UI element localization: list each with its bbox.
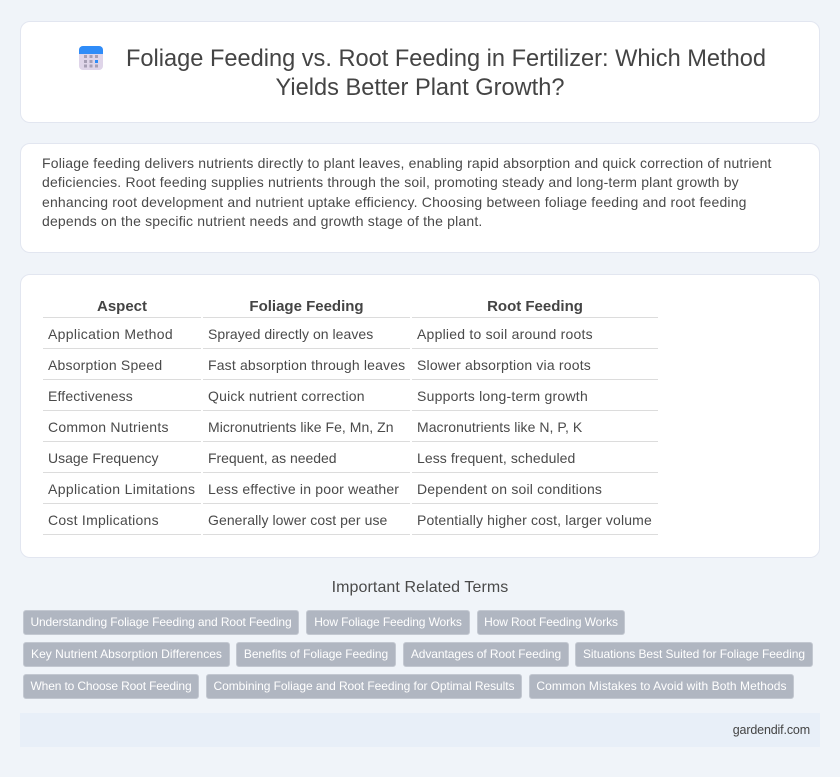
panel: comparison table: [20, 274, 820, 558]
comparison table: Usage Frequency: [48, 450, 159, 466]
panel: title card: [20, 21, 820, 123]
related term tags: Benefits of Foliage Feeding: [244, 647, 388, 661]
comparison table: Slower absorption via roots: [417, 357, 591, 373]
related term tags: Key Nutrient Absorption Differences: [31, 647, 222, 661]
comparison table: Dependent on soil conditions: [417, 481, 602, 497]
icon: calendar: [79, 46, 103, 70]
comparison table: Micronutrients like Fe, Mn, Zn: [208, 419, 394, 435]
intro paragraph: depends on the specific nutrient needs and growth stage of the plant.: [42, 213, 482, 229]
comparison table: Frequent, as needed: [208, 450, 336, 466]
intro paragraph: [42, 155, 772, 229]
comparison table: Less effective in poor weather: [208, 481, 399, 497]
comparison table: Quick nutrient correction: [208, 388, 365, 404]
comparison table: Application Limitations: [48, 481, 195, 497]
comparison table: Potentially higher cost, larger volume: [417, 512, 652, 528]
title: Foliage Feeding vs. Root Feeding in Fertilizer: Which Method: [126, 46, 766, 72]
comparison table: Cost Implications: [48, 512, 159, 528]
related term tags: Understanding Foliage Feeding and Root Feeding: [30, 615, 292, 629]
title: [126, 46, 766, 101]
related term tags: [23, 610, 813, 699]
comparison table: [43, 298, 658, 535]
comparison table: Fast absorption through leaves: [208, 357, 405, 373]
title: Yields Better Plant Growth?: [276, 75, 564, 101]
related term tags: Common Mistakes to Avoid with Both Methods: [536, 679, 787, 693]
comparison table: Foliage Feeding: [249, 298, 364, 315]
comparison table: Common Nutrients: [48, 419, 169, 435]
related term tags: Advantages of Root Feeding: [411, 647, 561, 661]
comparison table: Application Method: [48, 326, 173, 342]
related terms heading: Important Related Terms: [332, 579, 508, 596]
comparison table: Sprayed directly on leaves: [208, 326, 373, 342]
comparison table: Applied to soil around roots: [417, 326, 593, 342]
panel: intro text: [20, 143, 820, 253]
intro paragraph: Foliage feeding delivers nutrients directly to plant leaves, enabling rapid absorption and quick correction of nutrient: [42, 155, 772, 171]
related term tags: How Foliage Feeding Works: [314, 615, 462, 629]
comparison table: Less frequent, scheduled: [417, 450, 575, 466]
footer bar: [20, 713, 820, 747]
comparison table: Macronutrients like N, P, K: [417, 419, 582, 435]
comparison table: Generally lower cost per use: [208, 512, 387, 528]
comparison table: Supports long-term growth: [417, 388, 588, 404]
intro paragraph: enhancing root development and nutrient uptake efficiency. Choosing between foliage feeding and root feeding: [42, 194, 747, 210]
related term tags: Situations Best Suited for Foliage Feeding: [583, 647, 805, 661]
comparison table: Effectiveness: [48, 388, 133, 404]
related term tags: How Root Feeding Works: [484, 615, 618, 629]
comparison table: Root Feeding: [487, 298, 583, 315]
intro paragraph: deficiencies. Root feeding supplies nutrients through the soil, promoting steady and long-term plant growth by: [42, 174, 739, 190]
comparison table: Aspect: [97, 298, 147, 315]
comparison table: Absorption Speed: [48, 357, 162, 373]
footer source: gardendif.com: [733, 723, 810, 737]
related term tags: When to Choose Root Feeding: [30, 679, 192, 693]
related term tags: Combining Foliage and Root Feeding for Optimal Results: [214, 679, 514, 693]
